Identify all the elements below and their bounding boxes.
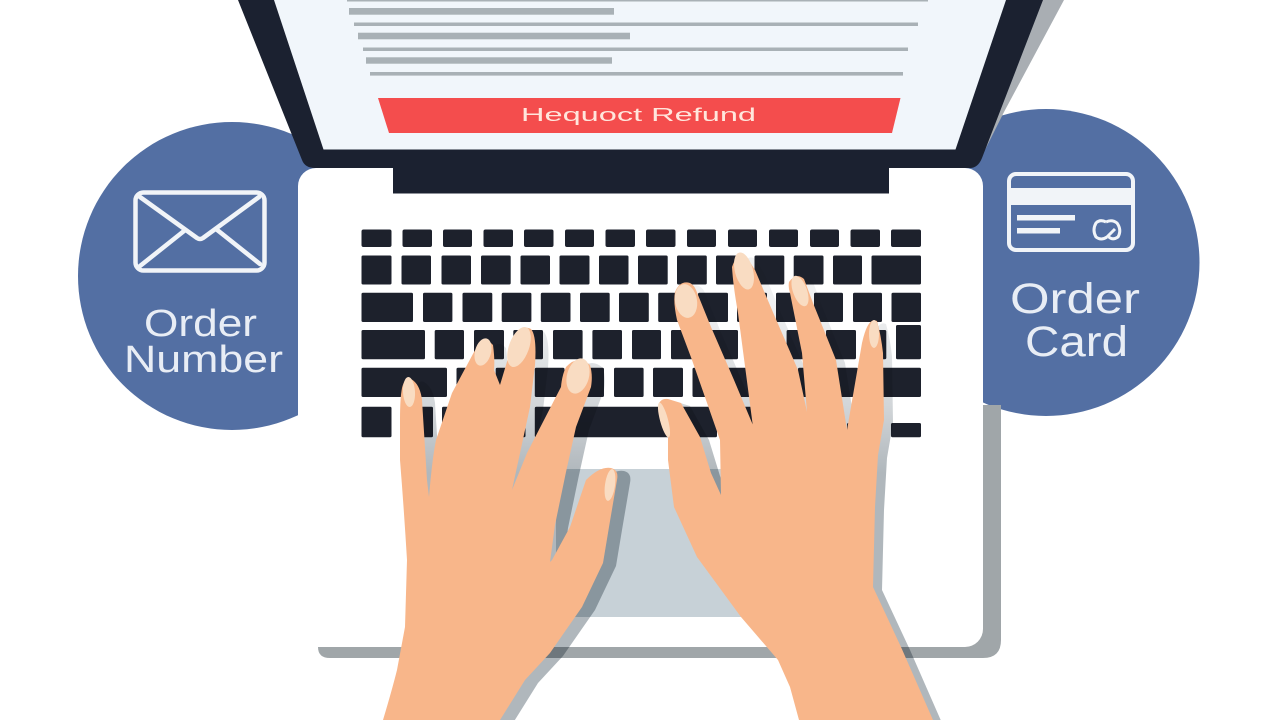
button: request refund: Hequoct Refund bbox=[521, 105, 756, 125]
button: request refund bbox=[378, 98, 900, 133]
hinge bbox=[393, 160, 889, 194]
keyboard row 3 bbox=[362, 293, 921, 322]
label: order card: Card bbox=[1025, 318, 1128, 366]
left hand shadow bbox=[396, 331, 630, 720]
laptop screen bbox=[238, 0, 1043, 194]
fingernails: left hand bbox=[402, 324, 617, 502]
keyboard row 6 bbox=[362, 407, 921, 437]
keyboard row 2 bbox=[362, 256, 921, 284]
laptop base shadow bbox=[318, 405, 1001, 658]
keyboard row 1 bbox=[362, 230, 921, 247]
screen bezel bbox=[238, 0, 1043, 168]
label: order number: Number bbox=[124, 339, 283, 381]
text lines on the screen bbox=[347, 0, 928, 76]
label: order number: Order bbox=[144, 303, 257, 345]
keyboard row 4 bbox=[362, 325, 921, 359]
label: order number bbox=[124, 303, 283, 381]
label: order card bbox=[1010, 275, 1140, 366]
badge: order card bbox=[892, 109, 1200, 416]
right hand shadow bbox=[668, 257, 942, 720]
screen display bbox=[274, 0, 1006, 150]
trackpad bbox=[556, 469, 746, 617]
right hand bbox=[655, 250, 933, 720]
icon: envelope bbox=[136, 192, 264, 270]
left hand bbox=[383, 324, 617, 720]
icon: credit card bbox=[1009, 174, 1133, 250]
screen shadow bbox=[985, 0, 1064, 150]
badge: order number bbox=[78, 122, 386, 430]
fingernails: right hand bbox=[655, 250, 879, 438]
keyboard bbox=[362, 230, 921, 437]
laptop base bbox=[298, 168, 983, 647]
label: order card: Order bbox=[1010, 275, 1140, 323]
keyboard row 5 bbox=[362, 368, 921, 397]
